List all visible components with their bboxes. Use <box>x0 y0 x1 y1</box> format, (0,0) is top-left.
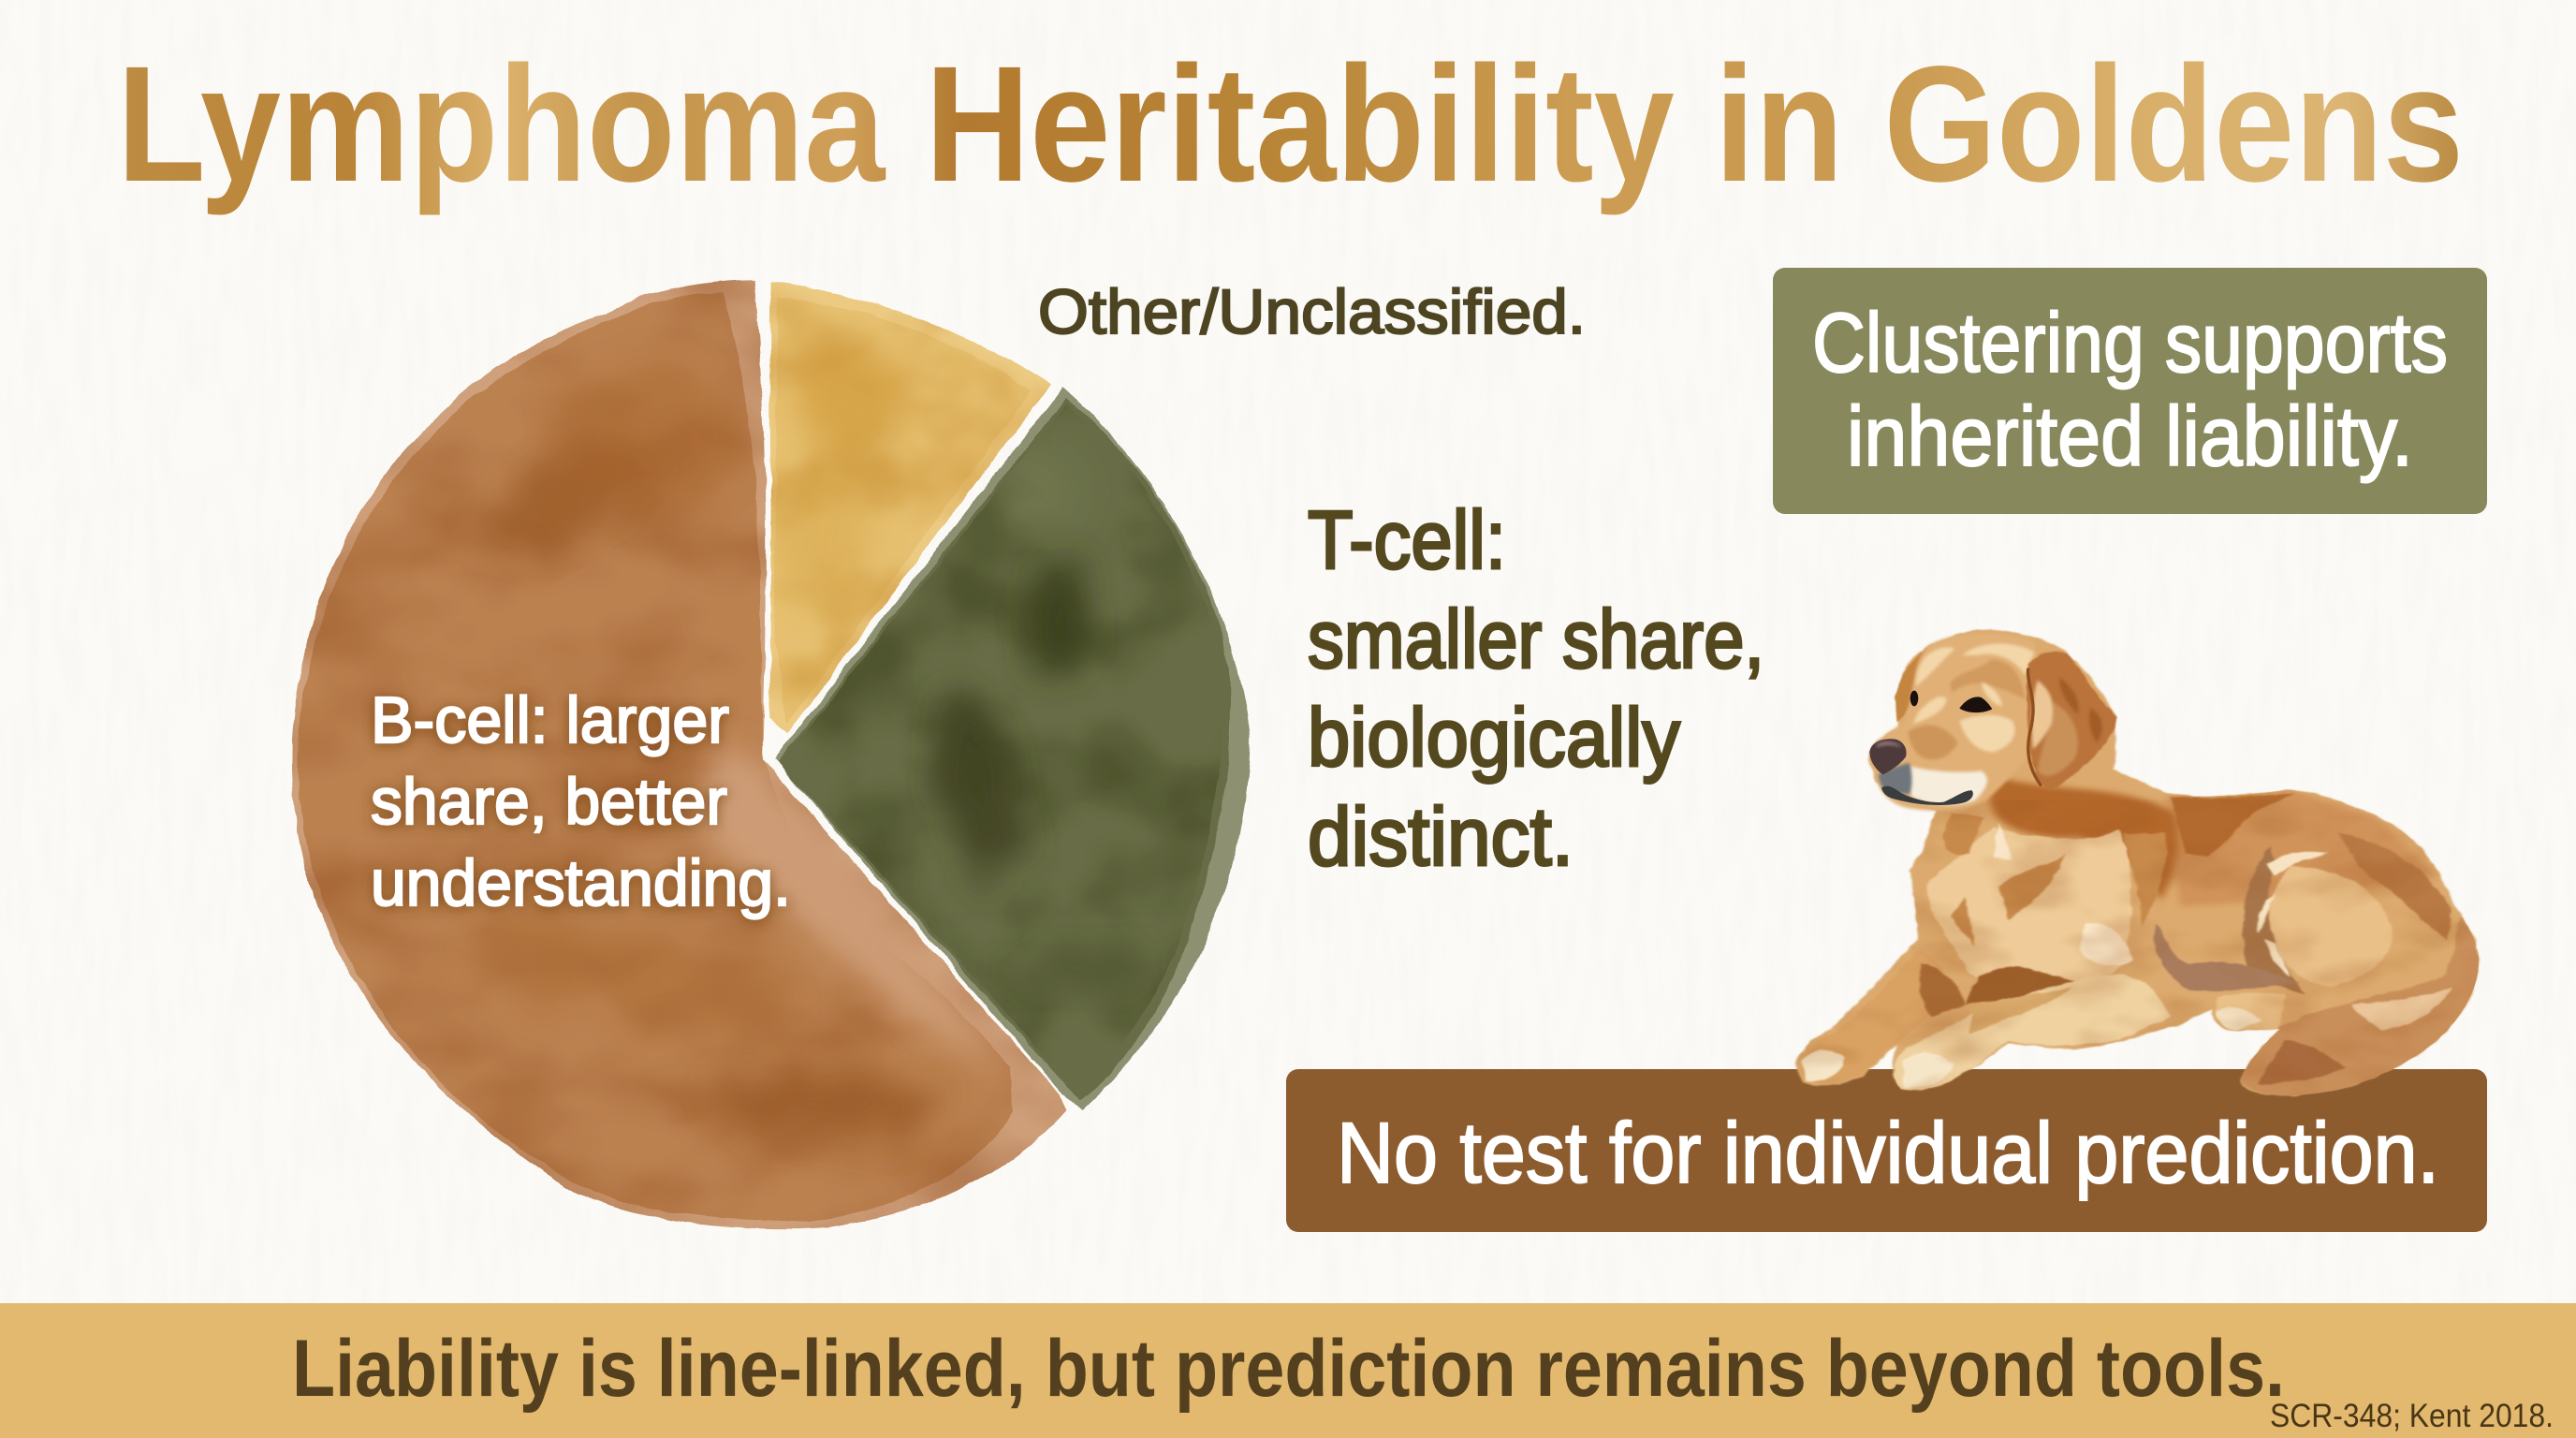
label: T-cell: smaller share, <box>1308 593 1764 685</box>
label: Other/Unclassified: Other/Unclassified. <box>1038 277 1586 347</box>
callout: clustering <box>1773 268 2487 514</box>
dog neck and chest <box>1926 773 2179 1004</box>
dog front legs <box>1800 950 2285 1091</box>
dog eyes <box>1910 691 1992 712</box>
pie chart: lymphoma subtypes <box>262 253 1253 1259</box>
pie slice: B-cell <box>292 279 1067 1230</box>
label: B-cell <box>371 683 791 919</box>
dog skull and muzzle <box>1870 633 2041 811</box>
callout: no test <box>1286 1069 2487 1232</box>
icon: golden retriever illustration <box>1789 629 2486 1101</box>
label: T-cell: T-cell: <box>1308 493 1506 586</box>
pie slice: T-cell <box>768 382 1253 1110</box>
callout: clustering: inherited liability. <box>1847 390 2413 484</box>
label: T-cell: biologically <box>1308 691 1680 784</box>
callout: no test: No test for individual prediction. <box>1337 1106 2439 1201</box>
label: T-cell: distinct. <box>1308 790 1573 883</box>
dog nose <box>1869 739 1907 774</box>
pie slice: Other/Unclassified <box>768 282 1051 733</box>
dog near ear <box>2027 652 2117 788</box>
dog mouth <box>1881 786 1973 805</box>
dog back and flank <box>2154 790 2452 993</box>
label: T-cell <box>1308 493 1764 883</box>
dog tail <box>2240 917 2480 1096</box>
dog far ear <box>1895 648 1928 723</box>
dog fur mottling <box>1789 800 2486 1101</box>
label: B-cell: B-cell: larger <box>371 683 729 756</box>
callout: clustering: Clustering supports <box>1812 297 2448 390</box>
label: B-cell: understanding. <box>371 846 791 919</box>
dog head <box>1869 633 2117 811</box>
footer band <box>0 1303 2576 1438</box>
footer takeaway: Liability is line-linked, but prediction remains beyond tools. <box>292 1324 2285 1414</box>
citation: SCR-348; Kent 2018. <box>2270 1398 2554 1434</box>
label: B-cell: share, better <box>371 765 727 838</box>
